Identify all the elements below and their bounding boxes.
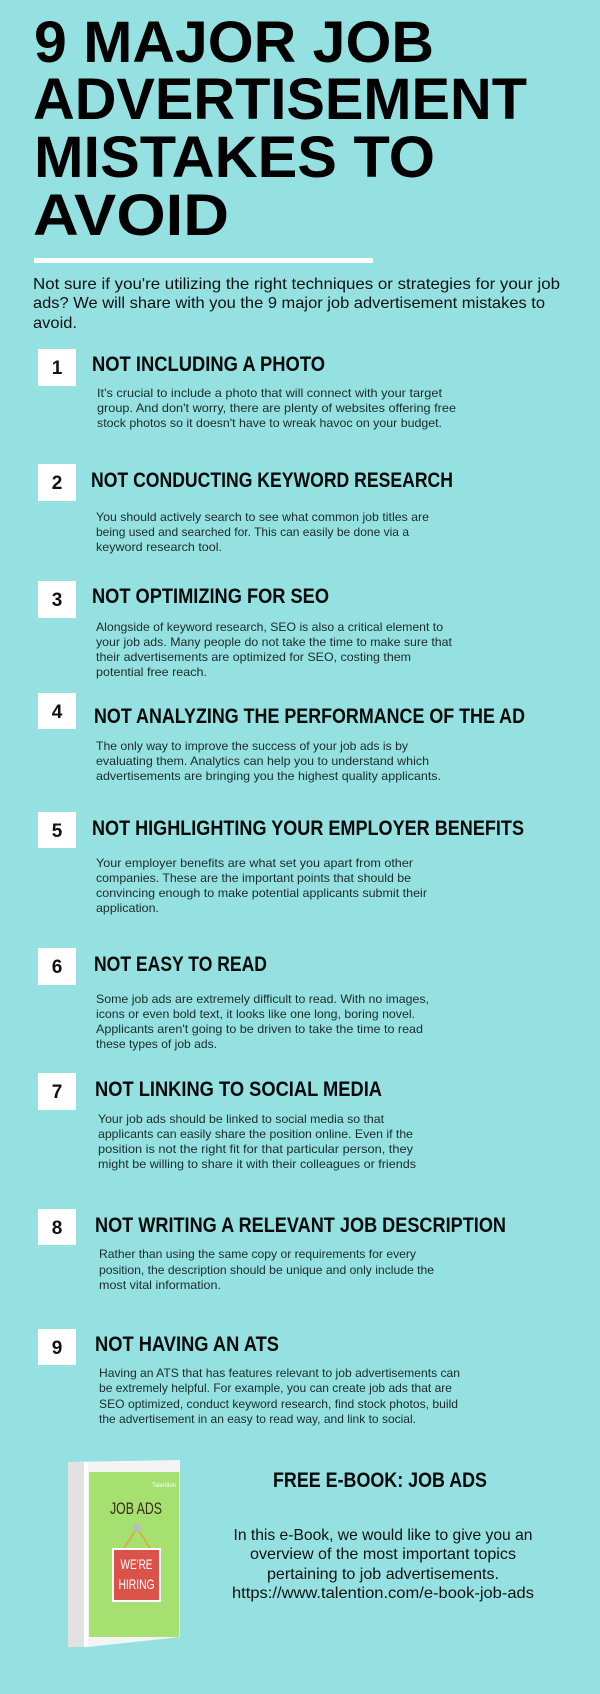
heading 8: NOT WRITING A RELEVANT JOB DESCRIPTION bbox=[95, 1214, 506, 1237]
body 1 bbox=[97, 386, 456, 430]
title: MISTAKES TO bbox=[34, 125, 435, 190]
body 9: SEO optimized, conduct keyword research, find stock photos, build bbox=[99, 1397, 458, 1411]
item 6 bbox=[38, 948, 429, 1051]
number box 4 bbox=[38, 693, 76, 729]
item 3 bbox=[38, 581, 453, 679]
body 7: position is not the right fit for that particular person, they bbox=[98, 1142, 413, 1156]
body 7: applicants can easily share the position online. Even if the bbox=[98, 1127, 413, 1141]
number box 5 bbox=[38, 812, 76, 848]
icon: e-book cover: JOB ADS bbox=[110, 1499, 162, 1518]
e-book description: In this e-Book, we would like to give you an bbox=[234, 1527, 532, 1544]
item 1 bbox=[38, 349, 456, 430]
body 6 bbox=[96, 992, 429, 1051]
body 3: your job ads. Many people do not take the time to make sure that bbox=[96, 635, 453, 649]
body 2: keyword research tool. bbox=[96, 540, 222, 554]
e-book description: pertaining to job advertisements. bbox=[267, 1566, 499, 1583]
body 3: Alongside of keyword research, SEO is also a critical element to bbox=[96, 620, 443, 634]
body 9: the advertisement in an easy to read way, and link to social. bbox=[99, 1412, 416, 1426]
number box 6 bbox=[38, 948, 76, 985]
number box 8: 8 bbox=[52, 1218, 62, 1239]
item 7 bbox=[38, 1073, 416, 1171]
title bbox=[33, 10, 527, 248]
item 5 bbox=[38, 812, 524, 915]
body 2: You should actively search to see what common job titles are bbox=[96, 510, 429, 524]
body 2 bbox=[96, 510, 429, 554]
intro text bbox=[33, 276, 560, 332]
number box 6: 6 bbox=[52, 957, 62, 978]
body 8: Rather than using the same copy or requirements for every bbox=[99, 1247, 416, 1261]
body 9: Having an ATS that has features relevant to job advertisements can bbox=[99, 1366, 460, 1380]
e-book description: overview of the most important topics bbox=[250, 1546, 516, 1563]
number box 8 bbox=[38, 1209, 76, 1245]
body 4: The only way to improve the success of your job ads is by bbox=[96, 739, 408, 753]
body 5 bbox=[96, 856, 427, 915]
item 9 bbox=[38, 1329, 460, 1426]
body 6: these types of job ads. bbox=[96, 1037, 217, 1051]
body 4: advertisements are bringing you the highest quality applicants. bbox=[96, 769, 441, 783]
heading 7: NOT LINKING TO SOCIAL MEDIA bbox=[95, 1078, 382, 1101]
heading 1: NOT INCLUDING A PHOTO bbox=[92, 353, 325, 376]
item 8 bbox=[38, 1209, 506, 1292]
intro text: ads? We will share with you the 9 major job advertisement mistakes to bbox=[33, 295, 545, 312]
heading 9: NOT HAVING AN ATS bbox=[95, 1333, 279, 1356]
icon: e-book cover bbox=[68, 1460, 180, 1647]
body 7 bbox=[98, 1112, 416, 1171]
number box 2: 2 bbox=[52, 473, 62, 494]
number box 3 bbox=[38, 581, 76, 618]
body 3: their advertisements are optimized for SEO, costing them bbox=[96, 650, 411, 664]
heading 6: NOT EASY TO READ bbox=[94, 953, 267, 976]
number box 3: 3 bbox=[52, 590, 62, 611]
body 5: application. bbox=[96, 901, 159, 915]
body 3: potential free reach. bbox=[96, 665, 207, 679]
number box 2 bbox=[38, 464, 76, 501]
body 4: evaluating them. Analytics can help you to understand which bbox=[96, 754, 429, 768]
body 7: Your job ads should be linked to social media so that bbox=[98, 1112, 385, 1126]
title: 9 MAJOR JOB bbox=[34, 10, 434, 75]
body 1: stock photos so it doesn't have to wreak havoc on your budget. bbox=[97, 416, 442, 430]
body 1: group. And don't worry, there are plenty of websites offering free bbox=[97, 401, 456, 415]
body 5: convincing enough to make potential applicants submit their bbox=[96, 886, 427, 900]
number box 7: 7 bbox=[52, 1082, 62, 1103]
body 6: icons or even bold text, it looks like one long, boring novel. bbox=[96, 1007, 415, 1021]
body 3 bbox=[96, 620, 453, 679]
body 6: Some job ads are extremely difficult to read. With no images, bbox=[96, 992, 429, 1006]
title: ADVERTISEMENT bbox=[33, 67, 527, 132]
icon: e-book cover: HIRING bbox=[118, 1576, 154, 1592]
body 2: being used and searched for. This can easily be done via a bbox=[96, 525, 409, 539]
body 9: be extremely helpful. For example, you can create job ads that are bbox=[99, 1381, 452, 1395]
body 8: most vital information. bbox=[99, 1278, 221, 1292]
body 8: position, the description should be unique and only include the bbox=[99, 1263, 434, 1277]
icon: e-book cover: Talention bbox=[152, 1483, 176, 1489]
intro text: avoid. bbox=[33, 315, 77, 332]
heading: free e-book: FREE E-BOOK: JOB ADS bbox=[273, 1469, 487, 1492]
body 5: companies. These are the important points that should be bbox=[96, 871, 411, 885]
body 1: It's crucial to include a photo that will connect with your target bbox=[97, 386, 443, 400]
item 4 bbox=[38, 693, 525, 783]
body 6: Applicants aren't going to be driven to take the time to read bbox=[96, 1022, 423, 1036]
heading 4: NOT ANALYZING THE PERFORMANCE OF THE AD bbox=[94, 705, 525, 728]
number box 9: 9 bbox=[52, 1338, 62, 1359]
heading 2: NOT CONDUCTING KEYWORD RESEARCH bbox=[91, 469, 453, 492]
body 9 bbox=[99, 1366, 460, 1426]
number box 9 bbox=[38, 1329, 76, 1365]
body 7: might be willing to share it with their colleagues or friends bbox=[98, 1157, 416, 1171]
number box 1: 1 bbox=[52, 358, 63, 379]
number box 1 bbox=[38, 349, 76, 386]
number box 4: 4 bbox=[52, 702, 63, 723]
number box 5: 5 bbox=[52, 821, 63, 842]
body 5: Your employer benefits are what set you apart from other bbox=[96, 856, 413, 870]
intro text: Not sure if you're utilizing the right techniques or strategies for your job bbox=[33, 276, 560, 293]
e-book description: https://www.talention.com/e-book-job-ads bbox=[232, 1585, 534, 1602]
icon: e-book cover: WE'RE bbox=[120, 1556, 152, 1572]
item 2 bbox=[38, 464, 453, 554]
heading 3: NOT OPTIMIZING FOR SEO bbox=[92, 585, 329, 608]
body 8 bbox=[99, 1247, 434, 1292]
title: AVOID bbox=[33, 183, 229, 248]
e-book description bbox=[232, 1527, 534, 1602]
body 4 bbox=[96, 739, 441, 783]
heading 5: NOT HIGHLIGHTING YOUR EMPLOYER BENEFITS bbox=[92, 817, 524, 840]
number box 7 bbox=[38, 1073, 76, 1110]
